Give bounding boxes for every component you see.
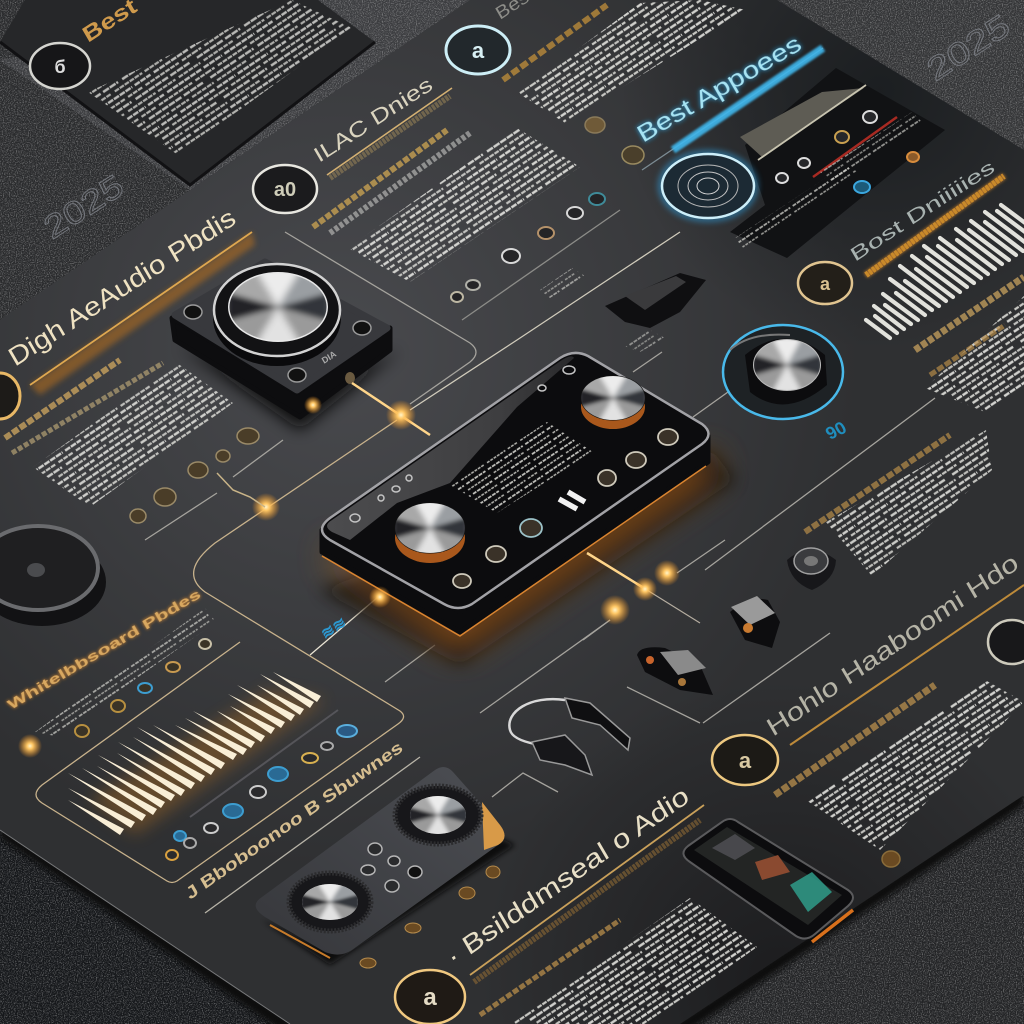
badge icon xyxy=(798,262,852,304)
badge icon xyxy=(712,735,778,785)
top-left sheet: heading and body text xyxy=(30,0,352,155)
small icons xyxy=(451,193,605,302)
panel outlines xyxy=(36,48,935,913)
body text xyxy=(88,0,352,155)
small orange dot xyxy=(585,117,605,133)
year label right: 2025 xyxy=(920,7,1016,88)
body text xyxy=(826,430,992,576)
buttons xyxy=(184,305,371,382)
small icons xyxy=(130,428,259,523)
knob bottom xyxy=(289,873,371,931)
left ring device xyxy=(0,526,106,626)
heading: Best xyxy=(78,0,142,47)
shadow xyxy=(262,838,515,965)
small icons xyxy=(75,639,211,737)
smartphone xyxy=(683,819,853,942)
knob body xyxy=(745,338,827,404)
badge icon: a xyxy=(820,274,831,294)
earhook headphones xyxy=(509,698,630,775)
section: best apps (blue) xyxy=(622,30,945,258)
glow dot xyxy=(18,734,42,758)
badge icon xyxy=(30,43,90,89)
speaker device xyxy=(172,262,400,430)
media divider xyxy=(758,85,866,160)
secondary twin-knob device xyxy=(256,767,515,968)
badge icon xyxy=(446,26,510,74)
small orange dot xyxy=(882,851,900,867)
heading: Hohlo Haaboomi Hdo xyxy=(762,548,1023,742)
badge icon: б xyxy=(54,57,66,77)
dark media panel xyxy=(730,68,945,258)
phone orange edge xyxy=(812,910,853,942)
body text xyxy=(518,0,746,123)
gold underline xyxy=(327,88,452,175)
year label left: 2025 xyxy=(37,167,129,246)
earbud case icon xyxy=(787,548,836,590)
gold sub-text band xyxy=(474,820,700,982)
white subheading xyxy=(330,133,470,233)
lower orange rim xyxy=(270,925,330,958)
blue ring xyxy=(723,325,843,419)
blue label: 90 xyxy=(822,418,850,443)
badge icon: a xyxy=(739,748,752,773)
blue concentric icon xyxy=(661,153,755,219)
gold subheading xyxy=(5,360,120,438)
side xyxy=(172,318,390,417)
phone screen xyxy=(694,827,842,925)
section: ILAC drives xyxy=(253,73,605,302)
media controls xyxy=(776,111,919,193)
waveform xyxy=(68,672,325,835)
left knob xyxy=(391,500,469,563)
gold subheading xyxy=(775,685,935,795)
glass reflection xyxy=(327,356,574,540)
screen text xyxy=(450,422,593,513)
phone screen content xyxy=(790,872,832,912)
knob top xyxy=(395,786,481,844)
body xyxy=(256,767,505,955)
earbud right xyxy=(637,647,713,695)
gold subheading lower xyxy=(930,325,1005,375)
body text xyxy=(735,165,858,250)
heading: Whitelbbsoard Pbdes xyxy=(4,585,204,713)
earbud left xyxy=(730,596,780,648)
model label: DIA xyxy=(320,348,338,366)
gold underline xyxy=(790,585,1024,745)
blue icon: ≋≋ xyxy=(318,614,350,643)
badge icon xyxy=(253,165,317,213)
right orange corner xyxy=(482,802,505,850)
heading: ILAC Dnies xyxy=(310,73,437,167)
section: bottom audio xyxy=(395,782,757,1024)
heading: Digh AeAudio Pbdis xyxy=(4,204,241,372)
port xyxy=(345,372,355,384)
orange under-glow xyxy=(330,455,720,650)
gold underline xyxy=(866,176,1004,275)
knob xyxy=(213,264,341,366)
drop shadow xyxy=(320,450,735,665)
lower icon row xyxy=(166,725,357,860)
main audio device xyxy=(320,353,735,665)
glowing connectors bottom xyxy=(369,553,700,625)
heading: Bost Dniiiiies xyxy=(847,157,999,266)
small caption below product xyxy=(622,330,665,352)
gold underline xyxy=(470,805,704,975)
body text xyxy=(35,608,216,736)
section: holographic audio right xyxy=(712,548,1024,867)
gold subheading xyxy=(503,5,607,80)
gold sub-text band xyxy=(330,96,450,178)
white waveform xyxy=(866,205,1024,338)
section: top centre xyxy=(446,0,746,133)
badge icon: a0 xyxy=(274,179,296,201)
body text xyxy=(806,680,1024,850)
small icon xyxy=(622,146,644,164)
right cut-off badge xyxy=(988,620,1024,664)
top face xyxy=(175,262,387,390)
device top face xyxy=(322,353,708,608)
hook xyxy=(730,335,790,350)
badge icon xyxy=(395,970,465,1024)
gold underline xyxy=(30,232,252,385)
body text xyxy=(925,296,1024,412)
amber light xyxy=(304,396,322,414)
badge icon xyxy=(0,373,20,419)
section: best duties right xyxy=(798,157,1024,412)
orange glow xyxy=(30,232,255,395)
small orange marks xyxy=(360,866,500,968)
section: waveform panel xyxy=(4,585,406,903)
gold subheading xyxy=(313,130,447,227)
sub heading: J Bboboonoo B Sbuwnes xyxy=(182,737,406,903)
device side xyxy=(322,436,708,632)
small caption xyxy=(540,268,585,298)
top-left secondary sheet xyxy=(0,0,375,185)
gold subheading xyxy=(915,277,1024,350)
badge icon: a xyxy=(423,984,437,1011)
body text upper xyxy=(820,112,922,182)
body text xyxy=(348,128,580,282)
red indicator xyxy=(813,117,897,177)
heading: · Bsilddmseal o Adio xyxy=(442,782,694,972)
knob metal xyxy=(751,337,823,393)
orange rim line xyxy=(322,466,706,636)
blue underline xyxy=(673,48,823,150)
body text xyxy=(33,363,233,507)
body text xyxy=(510,898,757,1024)
right knob xyxy=(578,374,648,429)
right blue knob device xyxy=(723,325,843,419)
gold subheading xyxy=(480,920,620,1015)
small dark product top centre xyxy=(605,273,706,328)
section: mid right text xyxy=(805,430,992,576)
badge icon: a xyxy=(472,38,485,63)
shadow xyxy=(180,345,400,430)
glowing connector top xyxy=(217,383,430,521)
section: digital audio players xyxy=(0,204,259,523)
white subheading xyxy=(12,363,163,453)
small screen marks xyxy=(350,366,575,522)
gold subheading xyxy=(805,435,950,532)
small buttons xyxy=(361,843,422,892)
pause icon xyxy=(559,492,585,509)
heading: Best Appoees xyxy=(632,30,806,148)
control buttons xyxy=(453,429,678,588)
media image xyxy=(740,88,864,157)
